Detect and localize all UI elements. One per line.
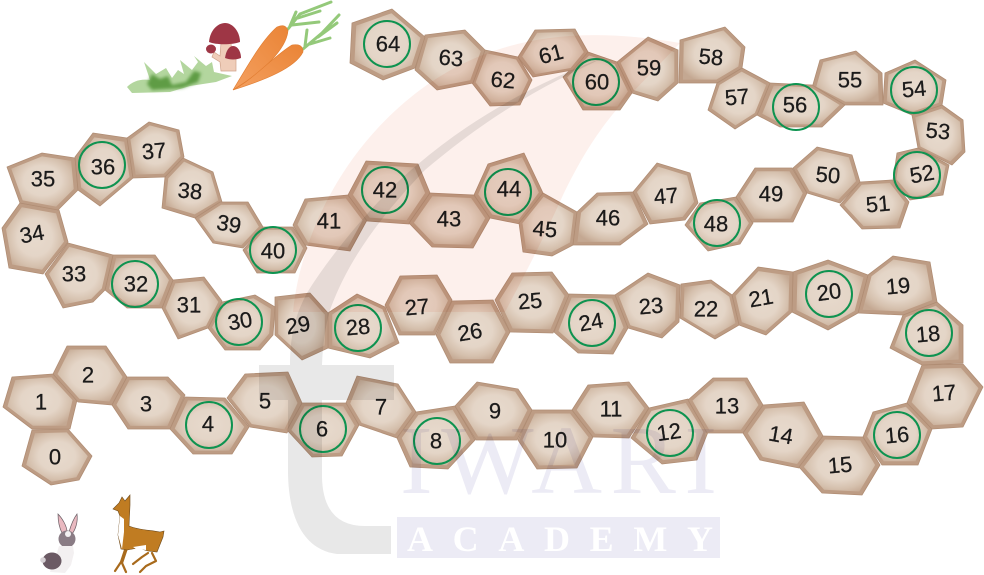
stone 61: 61 [536,39,566,69]
stone 11: 11 [600,396,622,422]
icon: mushrooms [206,23,241,71]
stone 53 [912,105,965,165]
stone 29: 29 [284,311,312,339]
stone 0: 0 [49,444,61,470]
stone 46: 46 [596,206,620,230]
stone 8 [397,406,475,469]
stone 47: 47 [653,182,679,210]
stone 37: 37 [141,137,167,165]
stone 1 [3,374,77,429]
stone 41: 41 [317,208,341,234]
stone 5 [227,372,302,433]
stone 62: 62 [490,66,516,94]
stone 26: 26 [456,318,484,346]
stone 7 [346,376,416,438]
stone 43: 43 [437,206,461,232]
stone 30: 30 [226,307,254,335]
stone 18 [890,302,963,365]
stone 51: 51 [865,190,891,218]
icon: carrots [233,2,339,90]
stone 61 [518,29,588,77]
stone 27 [385,275,452,335]
stone 21 [732,267,793,335]
stone 6 [287,403,359,457]
stone 16 [863,403,932,465]
stone 8: 8 [430,428,442,454]
stone 31: 31 [177,292,201,318]
stone 13 [688,378,763,433]
stone 35 [7,153,78,210]
stone 24 [554,294,628,354]
watermark: pink arc [293,35,680,312]
stone 9 [455,382,532,440]
stone 33 [45,243,113,308]
stone 55: 55 [838,68,862,92]
stone 22 [680,280,739,339]
stone 22: 22 [694,296,718,322]
stone 21: 21 [747,284,775,312]
stone 15: 15 [827,451,853,479]
stone 54: 54 [901,75,927,103]
stone 14 [743,402,823,468]
stone 2 [53,346,127,405]
stone 25: 25 [517,287,543,315]
stone 63: 63 [438,44,464,72]
stone 23: 23 [638,292,664,320]
stone 2: 2 [82,362,94,388]
stone 26 [436,300,510,363]
stone 6: 6 [316,416,328,442]
stone 60: 60 [585,70,609,94]
stone 9: 9 [489,398,501,424]
stone 40 [243,227,307,273]
stone 38 [162,158,222,218]
stone 10 [518,410,593,469]
stone 36: 36 [91,154,115,180]
stone 19 [858,256,937,315]
stone 0 [22,429,92,485]
stone 50 [793,147,860,203]
stone 35: 35 [31,166,55,192]
stone 18: 18 [915,320,941,348]
stone 3 [112,377,185,429]
watermark: academy band: ACADEMY [407,519,713,559]
stone 4: 4 [202,412,214,436]
stone 5: 5 [259,388,271,414]
stone 49: 49 [759,182,783,206]
stone 11 [572,382,649,438]
stone 31 [162,277,222,339]
stone 59 [617,37,678,101]
stone 52: 52 [908,160,936,188]
stone 63 [415,30,485,90]
stone 42: 42 [373,178,397,202]
stone 24: 24 [577,308,605,336]
stone 45 [519,193,577,256]
stone 39 [195,202,263,248]
stone 56: 56 [783,92,807,118]
stone 56 [757,83,845,130]
icon: rabbit [40,514,77,573]
stone 20 [792,260,868,330]
stone 38: 38 [177,177,203,205]
stone 7: 7 [375,394,387,420]
stone 33: 33 [62,262,86,286]
stone 30 [208,295,275,350]
stone 4 [170,397,249,454]
stone 48: 48 [704,212,728,236]
stone 64: 64 [376,32,400,56]
stone 57 [708,68,770,129]
stone 53: 53 [925,117,951,145]
stone 3: 3 [140,392,152,416]
stone 1: 1 [35,390,47,414]
stone 17 [907,364,983,429]
stone 41 [293,195,367,251]
stone 60 [563,52,632,110]
stone 32: 32 [124,272,148,296]
stone 34: 34 [18,220,46,248]
stone 51 [840,180,909,229]
stone 62 [472,50,532,106]
stone 34 [2,203,68,274]
stone 40: 40 [261,238,285,264]
stone 16: 16 [884,421,910,449]
watermark: grey t logo [259,55,610,554]
stone 13: 13 [715,394,739,418]
watermark: IWARI wordmark: IWARI [400,407,717,515]
stone 15 [799,436,880,495]
stone 37 [127,122,184,178]
stone 50: 50 [815,161,841,189]
stone 10: 10 [543,428,567,452]
stone 42 [348,161,430,224]
stone 27: 27 [404,293,430,321]
stone 59: 59 [637,56,661,80]
stone 29 [275,293,328,360]
icon: deer [113,495,164,572]
stone 12 [631,399,708,464]
stone 46 [573,192,648,245]
stone 28 [328,294,399,358]
stone 57: 57 [724,83,750,111]
stone 58 [679,27,745,83]
stone 19: 19 [885,272,911,300]
icon: grass [127,56,232,93]
stone 64 [350,9,425,80]
stone 20: 20 [815,278,843,306]
stone 28: 28 [345,313,371,341]
stone 58: 58 [698,43,724,71]
stone 39: 39 [215,210,243,238]
stone 36 [75,133,133,206]
stone 23 [615,273,680,338]
stone 48 [685,197,753,251]
stone 32 [105,255,173,308]
stone 52 [893,148,949,200]
stone 55 [812,51,883,105]
stone 14: 14 [767,421,795,449]
stone 43 [409,193,490,248]
stone 54 [883,60,946,115]
stone 49 [736,168,807,222]
stone 17: 17 [931,379,957,407]
stone 45: 45 [532,215,558,243]
stone 25 [495,272,569,333]
stone 12: 12 [655,418,683,446]
stone 44: 44 [497,176,521,202]
stone 44 [474,153,543,224]
stone 47 [633,163,698,224]
